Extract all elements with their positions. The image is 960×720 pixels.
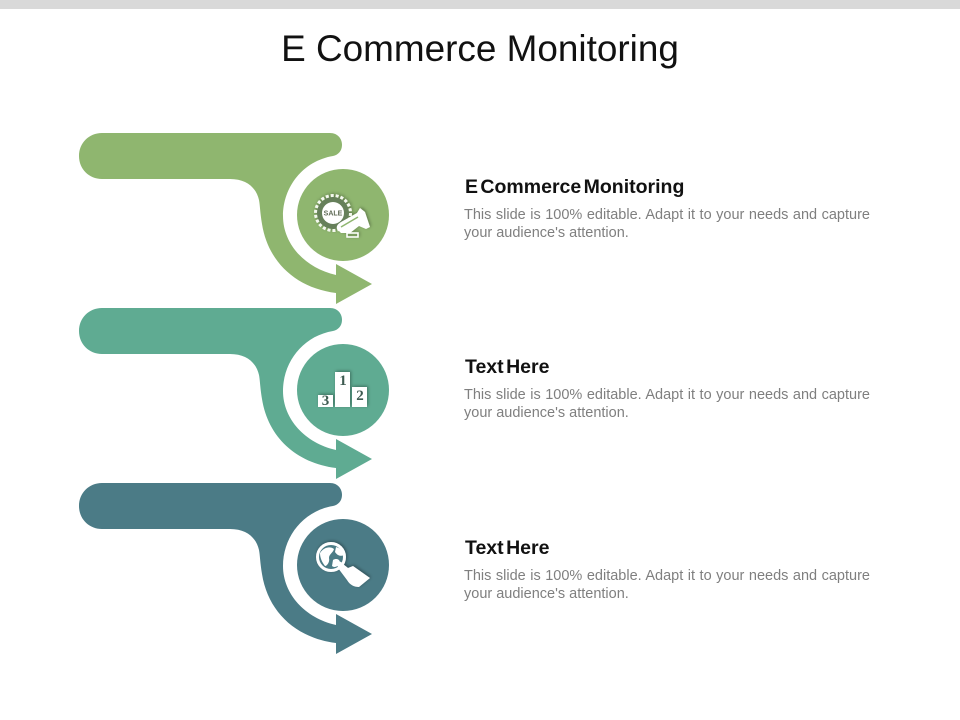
step 3 circle bbox=[297, 519, 389, 611]
icon: sale badge and megaphone: SALE bbox=[324, 210, 343, 218]
icon: podium: 2 bbox=[356, 388, 364, 404]
text block 2 bbox=[464, 356, 870, 421]
title: E Commerce Monitoring bbox=[281, 28, 679, 69]
icon: sale badge and megaphone bbox=[316, 196, 370, 237]
text block 2: Text Here bbox=[465, 356, 549, 378]
icon: globe and pointing hand bbox=[318, 544, 370, 587]
step 2 circle bbox=[297, 344, 389, 436]
text block 2: This slide is 100% editable. Adapt it to your needs and capture your audience's attention. bbox=[464, 387, 870, 421]
text block 3: This slide is 100% editable. Adapt it to your needs and capture your audience's attention. bbox=[464, 568, 870, 602]
text block 3 bbox=[464, 537, 870, 602]
text block 1: E Commerce Monitoring bbox=[465, 176, 684, 198]
icon: podium: 3 bbox=[322, 393, 329, 409]
text block 1: This slide is 100% editable. Adapt it to your needs and capture your audience's attention. bbox=[464, 207, 870, 241]
step 2 arrow bbox=[79, 308, 372, 479]
top bar bbox=[0, 0, 960, 9]
step 1 circle bbox=[297, 169, 389, 261]
text block 1 bbox=[464, 176, 870, 241]
icon: podium bbox=[318, 372, 367, 409]
icon: podium: 1 bbox=[339, 373, 347, 389]
text block 3: Text Here bbox=[465, 537, 549, 559]
step 3 arrow bbox=[79, 483, 372, 654]
step 1 arrow bbox=[79, 133, 372, 304]
